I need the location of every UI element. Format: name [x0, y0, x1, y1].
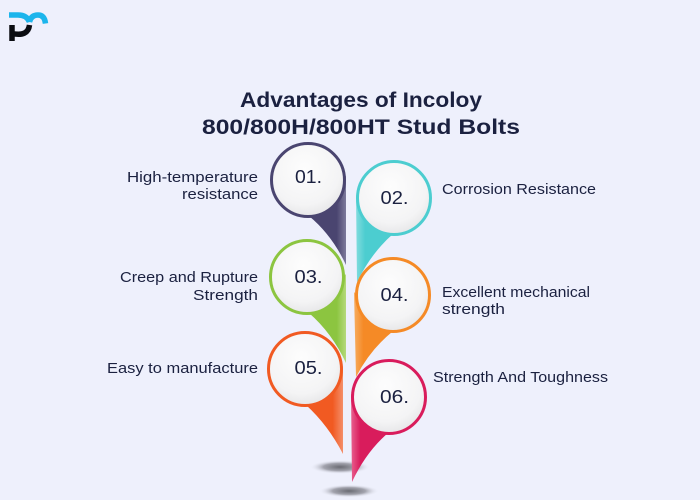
shadow: pin 06 — [319, 484, 379, 498]
title: 800/800H/800HT Stud Bolts — [202, 115, 520, 139]
label 06: Strength And Toughness — [433, 370, 608, 386]
pin 03: 03. — [294, 267, 322, 287]
pin 01: 01. — [295, 167, 322, 187]
label 03: Strength — [193, 288, 258, 304]
label 04: strength — [442, 302, 505, 318]
logo — [9, 15, 46, 41]
pin 04 — [354, 258, 430, 377]
pin 06 — [351, 360, 426, 482]
pin 01 — [272, 144, 346, 265]
pin 03 — [270, 240, 346, 363]
label 02: Corrosion Resistance — [442, 182, 596, 198]
shadow: pin 05 — [310, 460, 370, 474]
label 04 — [442, 285, 590, 318]
pin 04: 04. — [380, 285, 408, 305]
label 04: Excellent mechanical — [442, 285, 590, 301]
title: Advantages of Incoloy — [240, 88, 482, 112]
pin 05 — [268, 332, 343, 454]
label 01: High-temperature — [127, 170, 258, 186]
pin 02: 02. — [380, 188, 408, 208]
label 05: Easy to manufacture — [107, 361, 258, 377]
label 01: resistance — [182, 187, 258, 203]
title — [202, 88, 520, 139]
pin 02 — [356, 162, 430, 282]
label 01 — [127, 170, 258, 203]
label 03 — [120, 270, 258, 304]
label 03: Creep and Rupture — [120, 270, 258, 286]
pin 06: 06. — [380, 387, 409, 407]
pin 05: 05. — [294, 358, 322, 378]
